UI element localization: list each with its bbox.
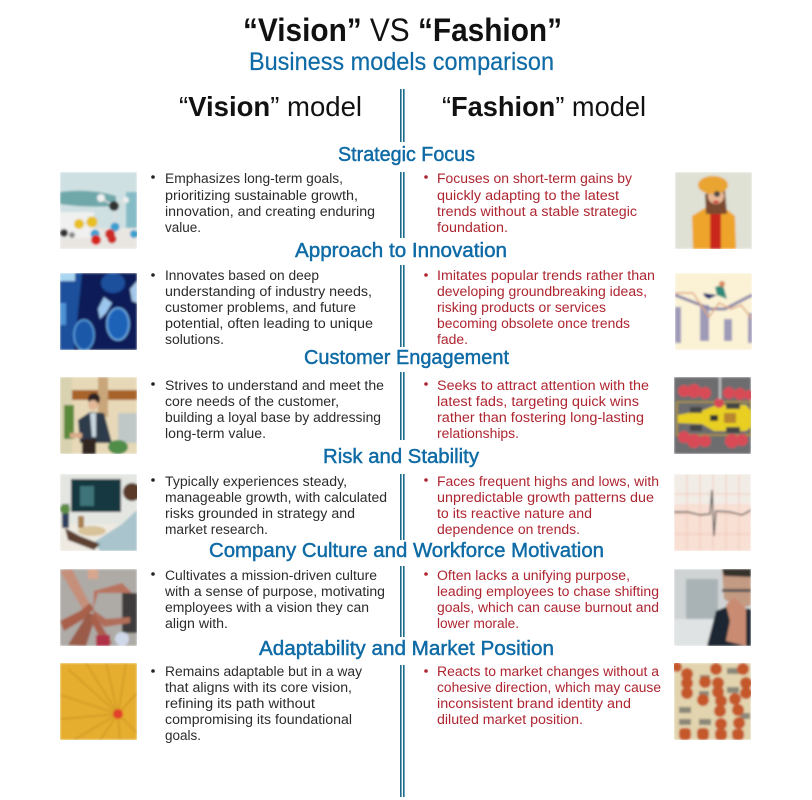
title: “Vision” VS “Fashion”	[243, 12, 562, 48]
text block: vision adaptability: Remains adaptable but in a way	[165, 664, 362, 679]
text block: fashion customer: relationships.	[437, 426, 519, 441]
image: worried man	[674, 569, 751, 646]
text block: fashion innovation: Imitates popular trends rather than	[437, 268, 655, 283]
text block: vision culture: with a sense of purpose, motivating	[164, 584, 385, 599]
text block: vision innovation: Innovates based on deep	[165, 268, 319, 283]
text block: vision innovation: customer problems, and future	[165, 300, 356, 315]
text block: vision adaptability: refining its path without	[165, 696, 315, 711]
image: woman in yellow	[675, 172, 752, 249]
subtitle: Business models comparison	[249, 48, 554, 76]
text block: fashion strategic focus: trends without a stable strategic	[437, 204, 637, 219]
image: ECG line	[674, 474, 751, 551]
text block: vision customer	[151, 378, 384, 441]
text block: fashion adaptability: inconsistent brand identity and	[437, 696, 631, 711]
text block: vision customer: building a loyal base by addressing	[165, 410, 381, 425]
text block: fashion culture	[424, 568, 659, 631]
text block: fashion customer: rather than fostering long-lasting	[437, 410, 644, 425]
text block: fashion strategic focus: quickly adapting to the latest	[437, 188, 619, 203]
text block: vision risk: manageable growth, with calculated	[165, 490, 387, 505]
text block: vision adaptability	[151, 664, 362, 743]
heading: Risk and Stability: Risk and Stability	[323, 446, 479, 468]
image: data screen at desk	[60, 474, 141, 551]
image: hands together	[60, 569, 137, 646]
text block: fashion risk: unpredictable growth patterns due	[437, 490, 654, 505]
text block: vision adaptability: goals.	[165, 728, 201, 743]
column heading: Fashion model: “Fashion” model	[442, 91, 646, 122]
text block: vision risk: risks grounded in strategy and	[165, 506, 355, 521]
text block: vision culture	[151, 568, 385, 631]
text block: fashion customer: latest fads, targeting quick wins	[437, 394, 639, 409]
image: brain scans	[60, 273, 137, 350]
text block: fashion risk: to its reactive nature and	[437, 506, 592, 521]
text block: fashion culture: Often lacks a unifying purpose,	[437, 568, 630, 583]
text block: fashion innovation: fade.	[437, 332, 468, 347]
text block: fashion culture: leading employees to chase shifting	[437, 584, 659, 599]
text block: vision culture: employees with a vision they can	[165, 600, 369, 615]
text block: vision strategic focus: value.	[165, 220, 201, 235]
image: figure falling on chart	[675, 273, 752, 350]
text block: fashion risk: dependence on trends.	[437, 522, 580, 537]
text block: fashion culture: goals, which can cause burnout and	[437, 600, 659, 615]
text block: fashion innovation	[424, 268, 655, 347]
text block: vision customer: long-term value.	[165, 426, 266, 441]
text block: fashion strategic focus: foundation.	[437, 220, 508, 235]
text block: fashion adaptability: diluted market position.	[437, 712, 583, 727]
text block: fashion adaptability	[424, 664, 661, 727]
text block: fashion innovation: becoming obsolete once trends	[437, 316, 630, 331]
image: red game pieces on numbers	[672, 662, 752, 740]
text block: vision innovation: understanding of industry needs,	[165, 284, 372, 299]
text block: fashion customer: Seeks to attract attention with the	[437, 378, 649, 393]
text block: vision customer: core needs of the customer,	[165, 394, 339, 409]
text block: vision customer: Strives to understand and meet the	[165, 378, 384, 393]
text block: fashion innovation: developing groundbreaking ideas,	[437, 284, 647, 299]
text block: fashion adaptability: cohesive direction, which may cause	[437, 680, 661, 695]
text block: vision innovation: potential, often leading to unique	[165, 316, 373, 331]
text block: fashion strategic focus	[424, 171, 637, 235]
text block: vision adaptability: compromising its foundational	[165, 712, 352, 727]
text block: vision strategic focus	[151, 171, 375, 235]
column heading: Vision model: “Vision” model	[179, 91, 362, 122]
image: molecule model	[60, 172, 138, 249]
text block: fashion risk	[424, 474, 659, 537]
text block: vision risk: Typically experiences steady,	[165, 474, 347, 489]
heading: Strategic Focus: Strategic Focus	[338, 144, 475, 166]
text block: vision culture: align with.	[165, 616, 228, 631]
text block: vision innovation: solutions.	[165, 332, 224, 347]
heading: Customer Engagement: Customer Engagement	[304, 347, 509, 369]
text block: vision risk: market research.	[165, 522, 268, 537]
heading: Company Culture and Workforce Motivation: Company Culture and Workforce Motivation	[209, 540, 604, 562]
text block: vision strategic focus: Emphasizes long-term goals,	[165, 171, 343, 186]
text block: vision strategic focus: prioritizing sustainable growth,	[165, 188, 358, 203]
image: yellow race car pit stop	[674, 377, 754, 454]
text block: vision strategic focus: innovation, and creating enduring	[165, 204, 375, 219]
text block: vision risk	[151, 474, 387, 537]
text block: fashion risk: Faces frequent highs and lows, with	[437, 474, 659, 489]
text block: fashion strategic focus: Focuses on short-term gains by	[437, 171, 632, 186]
centre divider	[400, 89, 405, 797]
text block: vision adaptability: that aligns with its core vision,	[165, 680, 352, 695]
image: yellow arrows to red dot	[60, 663, 137, 740]
image: woman in cafe	[60, 377, 137, 454]
heading: Approach to Innovation: Approach to Innovation	[295, 240, 507, 262]
heading: Adaptability and Market Position: Adaptability and Market Position	[259, 638, 554, 660]
text block: fashion culture: lower morale.	[437, 616, 519, 631]
text block: vision innovation	[151, 268, 373, 347]
text block: vision culture: Cultivates a mission-driven culture	[165, 568, 377, 583]
text block: fashion innovation: risking products or services	[437, 300, 606, 315]
text block: fashion customer	[424, 378, 649, 441]
text block: fashion adaptability: Reacts to market changes without a	[437, 664, 660, 679]
